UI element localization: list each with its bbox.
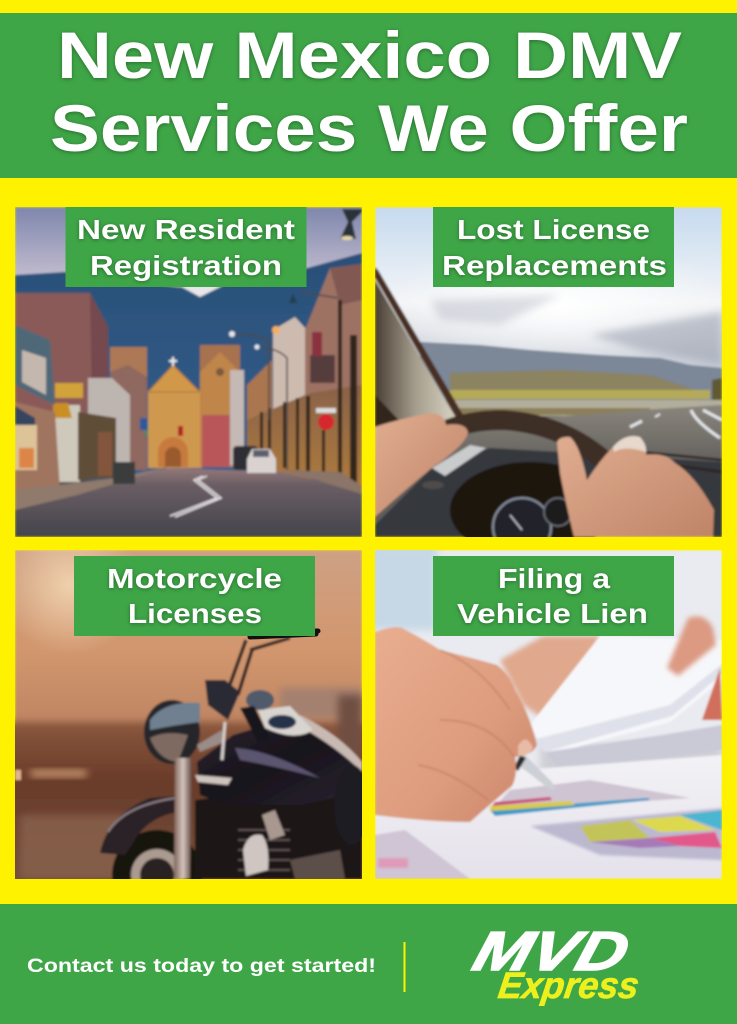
headlight	[144, 700, 200, 764]
seat	[334, 766, 362, 844]
label: Motorcycle	[107, 563, 282, 594]
photo: driver at steering wheel	[375, 207, 730, 558]
header banner	[0, 13, 737, 178]
title: New Mexico DMV	[57, 18, 682, 92]
handlebar end knob	[250, 631, 318, 637]
papers	[532, 636, 722, 752]
label: Vehicle Lien	[457, 598, 648, 629]
logo: Express	[496, 964, 642, 1006]
parked cars	[233, 446, 276, 473]
steering wheel	[420, 420, 608, 464]
engine	[193, 796, 362, 879]
panel: lost license replacements	[375, 207, 730, 558]
photo: santa fe street	[15, 207, 362, 537]
label	[66, 207, 306, 287]
tank	[196, 728, 354, 806]
pen	[514, 754, 554, 788]
footer band	[0, 904, 737, 1024]
label	[433, 556, 674, 636]
writing hand	[375, 627, 537, 822]
far hand	[667, 616, 716, 676]
title: Services We Offer	[50, 91, 688, 165]
photo: hand signing document	[370, 545, 722, 879]
right hand	[557, 436, 714, 537]
church	[148, 345, 244, 468]
fork	[174, 758, 192, 879]
dashboard	[375, 444, 722, 537]
fender	[100, 796, 177, 855]
label	[433, 207, 674, 287]
label: Filing a	[498, 563, 611, 594]
panel: filing a vehicle lien	[370, 545, 722, 879]
left hand	[375, 413, 468, 517]
panel: new resident registration	[15, 207, 362, 537]
arm	[500, 636, 600, 718]
label: Replacements	[442, 250, 667, 281]
windshield pillar	[375, 267, 465, 440]
console	[246, 690, 313, 736]
divider	[404, 942, 406, 992]
label: Licenses	[128, 598, 262, 629]
label: Registration	[90, 250, 282, 281]
photo: motorcycle at sunset	[15, 550, 362, 879]
logo	[467, 920, 642, 1006]
street lamps	[229, 292, 338, 470]
panel: motorcycle licenses	[15, 550, 362, 879]
label: Lost License	[457, 214, 650, 245]
label: New Resident	[77, 214, 295, 245]
logo: MVD	[467, 920, 636, 982]
label	[74, 556, 315, 636]
handlebars and risers	[205, 638, 290, 760]
title	[50, 18, 688, 165]
desk and chart	[375, 755, 722, 879]
road marking	[170, 476, 221, 517]
front wheel	[111, 829, 202, 879]
call to action: Contact us today to get started!	[27, 955, 376, 977]
